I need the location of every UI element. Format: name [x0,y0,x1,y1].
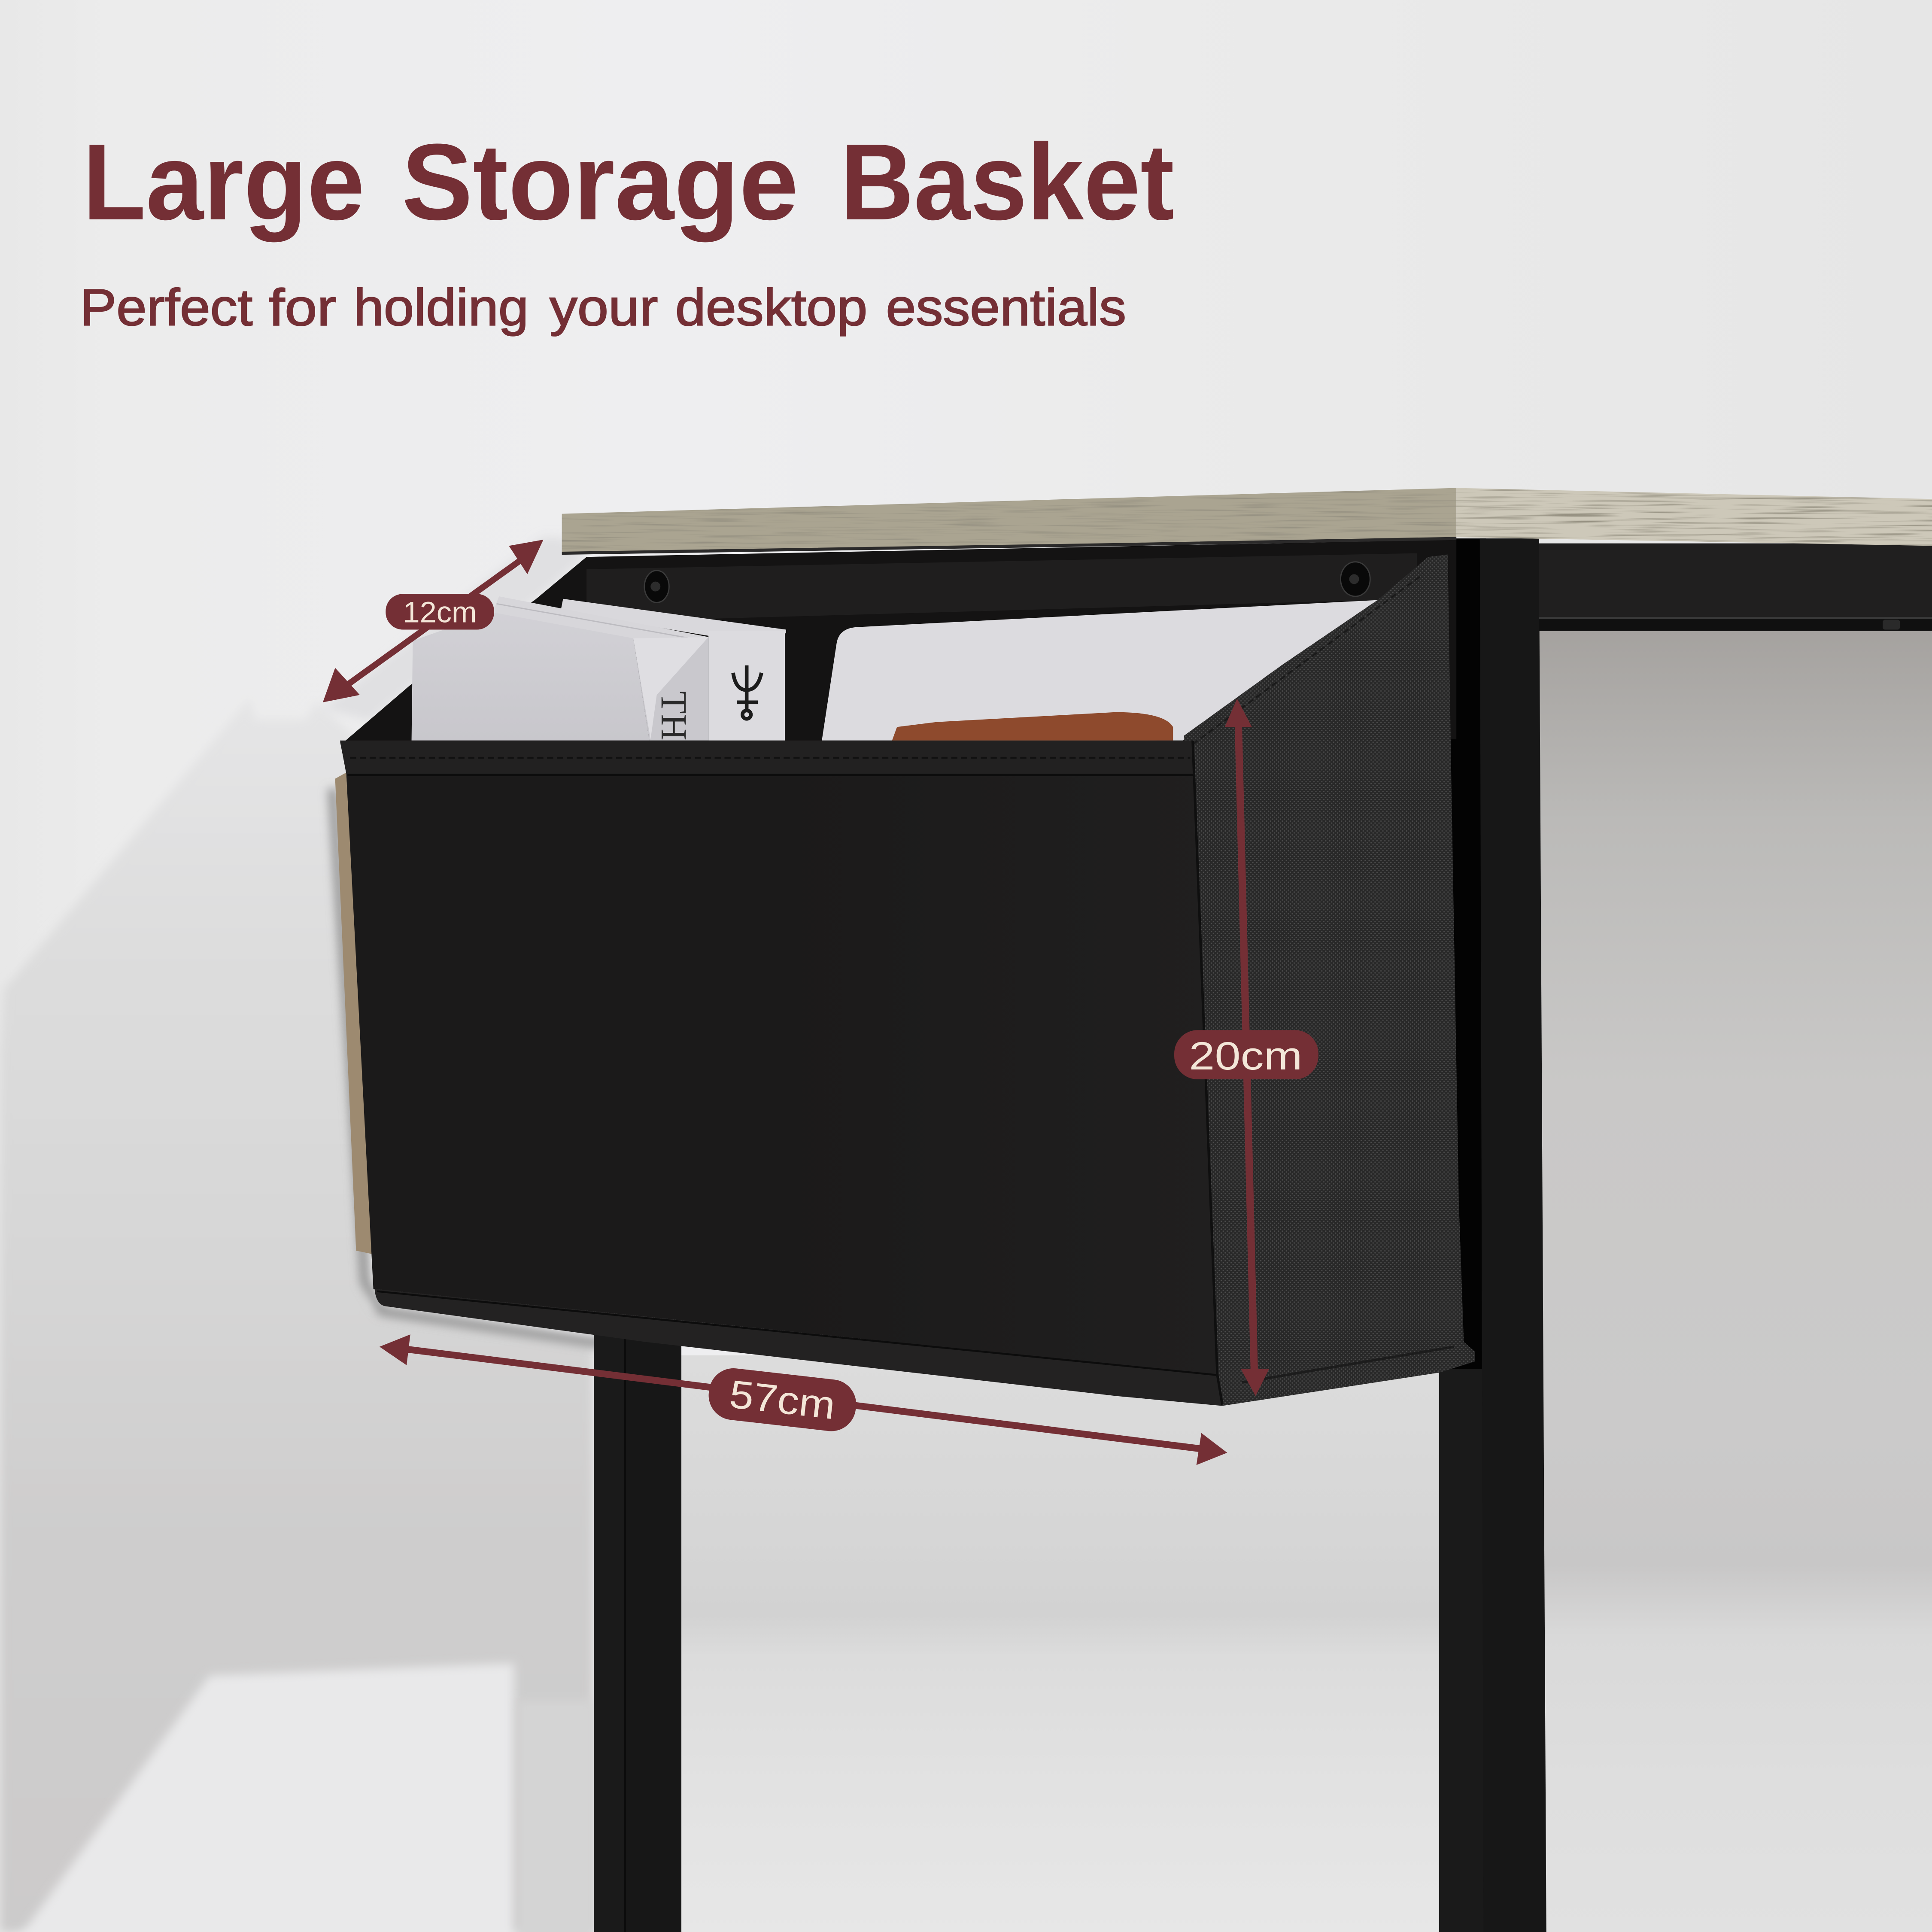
right lower leg [1439,1369,1486,1932]
title: Basket [840,121,1174,243]
label: 57cm [706,1366,859,1434]
anchor icon [733,665,762,719]
desk frame rail [1539,544,1932,631]
label: 12cm: 12cm [403,595,477,629]
dimension arrow: 20cm height [1174,699,1318,1396]
front book [412,596,708,741]
top hem [340,741,1194,774]
subtitle: holding [354,279,529,337]
title: Large [82,121,365,243]
subtitle: essentials [886,279,1126,337]
shadow under desk between legs [675,1355,1445,1932]
label: 20cm: 20cm [1189,1034,1302,1078]
page block [493,596,708,639]
label: 57cm: 57cm [727,1372,838,1428]
bottom hem [374,1289,1222,1406]
desktop tabletop [554,480,1932,554]
books in basket [412,596,786,741]
subtitle: desktop [675,279,867,337]
mounting screws [644,562,1370,602]
desk legs [594,538,1546,1932]
laptop or folder sheet [822,600,1378,741]
dimension arrow: 57cm width [380,1334,1227,1465]
basket side panel [1184,554,1475,1406]
right frame post outer [1480,538,1546,1932]
label: 12cm [386,594,494,630]
right frame post inner [1449,538,1486,1369]
label: 20cm [1174,1030,1318,1079]
title: Storage [402,121,799,243]
rear book [561,599,786,741]
book spine lettering: TH [653,691,695,741]
subtitle: for [269,279,336,337]
basket interior back panel [341,540,1456,744]
light wall behind desk corner [323,537,586,721]
subtitle: Perfect [80,279,252,337]
left leg [594,1331,681,1932]
wooden edge behind basket [335,772,374,1255]
basket front panel [340,741,1222,1406]
wall shadow cast by basket [0,697,641,1932]
shaded wall under desk, right of frame [1538,631,1932,1932]
cover [412,612,649,741]
subtitle: your [550,279,658,337]
tabletop front edge [562,488,1456,552]
dimension arrow: 12cm depth [323,540,544,702]
spine [633,637,708,741]
tabletop side edge [1456,488,1932,546]
leather wallet [892,712,1173,741]
